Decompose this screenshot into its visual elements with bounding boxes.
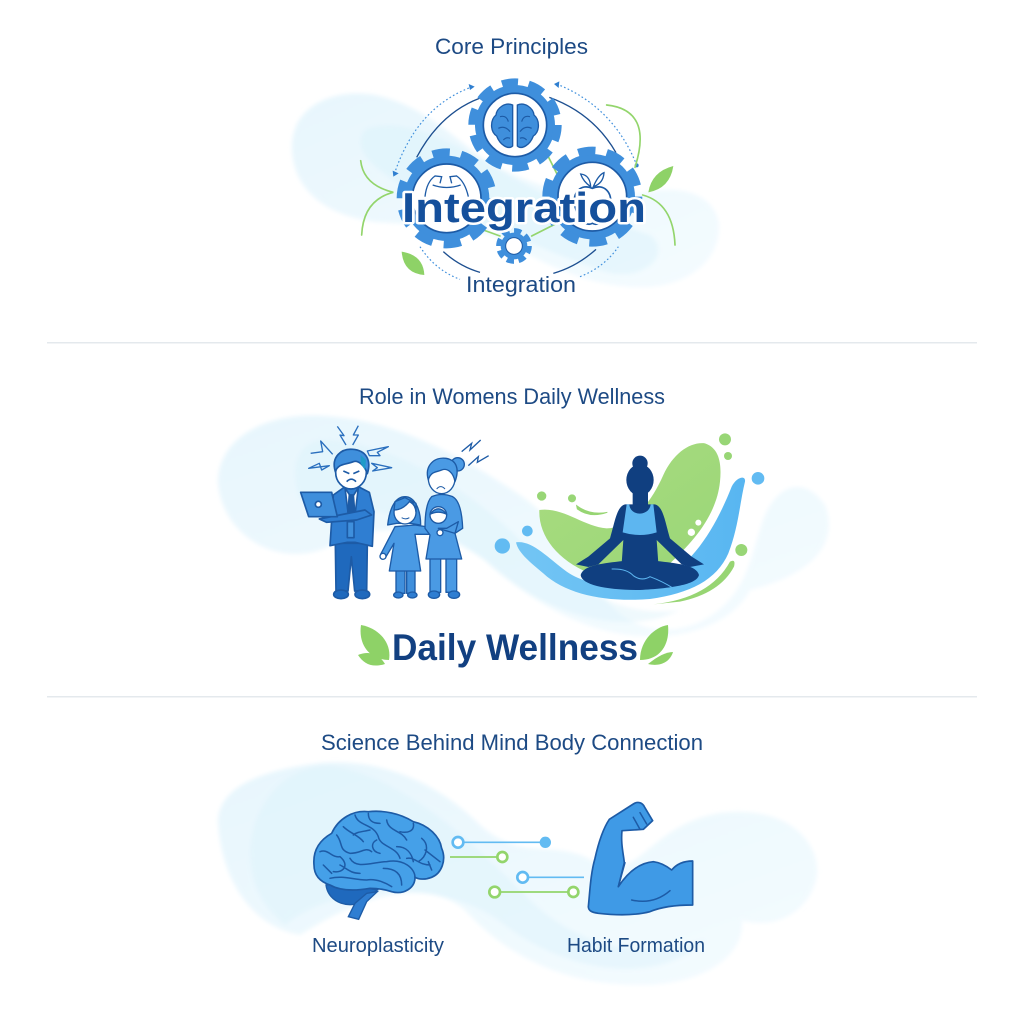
folds	[320, 813, 440, 887]
leaf right	[648, 166, 673, 192]
leaf left	[402, 252, 424, 275]
green swoosh	[653, 561, 734, 604]
label: Neuroplasticity: Neuroplasticity	[312, 935, 444, 957]
gear: mind	[473, 83, 557, 167]
stress bolts woman	[462, 440, 489, 466]
big label: Integration: Integration	[402, 184, 646, 231]
cerebrum	[314, 811, 444, 893]
label: Habit Formation: Habit Formation	[567, 935, 705, 957]
label: Daily Wellness: Daily Wellness	[392, 627, 638, 668]
muscle icon	[425, 176, 468, 197]
sports top	[623, 504, 657, 535]
diagram: integration gears	[361, 81, 675, 279]
label: Integration: Integration	[466, 272, 576, 297]
heading: Core Principles: Core Principles	[435, 34, 588, 59]
girl	[380, 497, 437, 598]
connectors: neural links	[450, 837, 584, 897]
green blob	[539, 443, 721, 573]
gear: body	[401, 153, 492, 244]
illustration: meditation	[495, 433, 764, 604]
leaf icon: right	[640, 625, 673, 665]
illustration: flexed arm	[588, 802, 693, 915]
illustration: stressed family	[301, 426, 489, 599]
meditating figure	[576, 456, 704, 590]
woman	[425, 458, 464, 598]
stress bolts man	[309, 426, 392, 471]
arcs connecting gears	[417, 97, 616, 273]
dotted arrows	[394, 84, 637, 279]
blue wave	[516, 478, 745, 600]
background blobs: core principles	[292, 93, 719, 287]
man	[301, 449, 374, 599]
background blobs: daily wellness	[218, 416, 829, 637]
cerebellum and stem	[326, 883, 377, 905]
arrow heads	[393, 81, 639, 177]
gear: nutrition	[547, 151, 638, 242]
background blobs: science	[218, 762, 817, 985]
heading: Science Behind Mind Body Connection: Science Behind Mind Body Connection	[321, 730, 703, 755]
gear: small	[499, 231, 529, 261]
illustration: brain	[314, 811, 444, 919]
apple icon	[574, 187, 611, 224]
brain icon	[492, 104, 538, 147]
green vines	[361, 105, 675, 245]
droplets	[495, 433, 764, 556]
heading: Role in Womens Daily Wellness: Role in Womens Daily Wellness	[359, 384, 665, 409]
leaf icon: left	[358, 625, 389, 666]
